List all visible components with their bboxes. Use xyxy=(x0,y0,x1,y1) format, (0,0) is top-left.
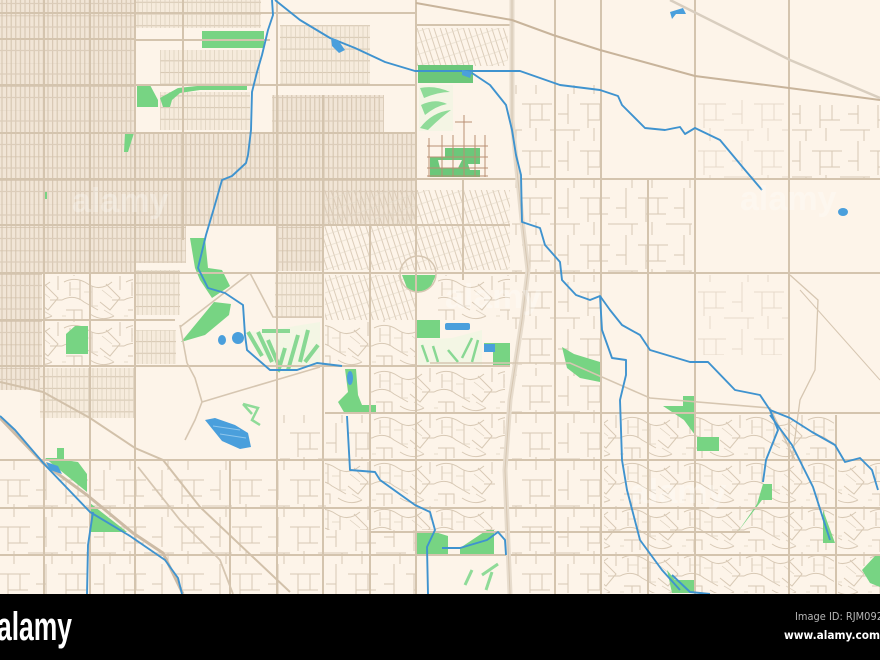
lake: reservoir xyxy=(205,418,251,449)
golf course: central xyxy=(246,322,320,374)
interstate highway xyxy=(505,0,528,594)
footer bar xyxy=(0,594,880,660)
faint watermark: alamy xyxy=(445,278,541,316)
golf course: south xyxy=(465,564,498,590)
faint watermark: alamy xyxy=(72,182,168,220)
golf course: lake side xyxy=(243,404,260,425)
golf course: south central xyxy=(418,330,482,365)
faint watermark: alamy xyxy=(740,180,836,218)
golf course: north xyxy=(419,85,453,131)
faint watermark: alamy xyxy=(630,473,726,511)
park: grid complex xyxy=(427,115,488,177)
street fabric: dense neighbourhoods xyxy=(0,0,416,418)
faint watermark xyxy=(72,180,836,511)
park: river corridor green xyxy=(418,65,473,83)
roundabout xyxy=(400,256,436,292)
small lakes xyxy=(46,8,848,474)
alamy logo: alamy xyxy=(0,605,72,649)
